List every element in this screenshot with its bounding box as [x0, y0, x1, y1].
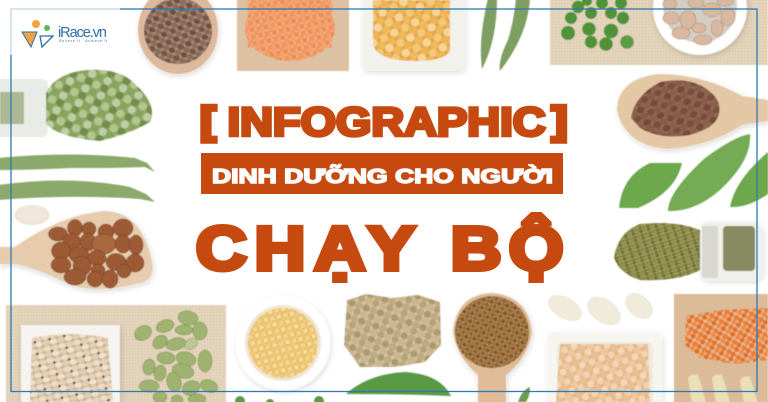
wooden spoon: fava beans left — [0, 211, 153, 289]
main title: CHẠY BỘ — [196, 214, 563, 282]
baby corn — [688, 374, 758, 402]
logo — [0, 0, 120, 55]
jar and green split peas left — [0, 70, 152, 141]
white bean — [15, 206, 49, 224]
heading: infographic: [ — [200, 100, 216, 142]
snow pea pods right — [619, 134, 768, 211]
snow pea bottom — [346, 372, 451, 396]
bowl: brown lentils on wooden spoon — [138, 0, 218, 74]
green beans — [132, 309, 220, 402]
mung beans — [614, 223, 704, 280]
dish: yellow split peas — [363, 0, 464, 70]
white dish: chickpeas — [548, 332, 662, 402]
subtitle banner: DINH DƯỠNG CHO NGƯỜI — [212, 164, 553, 188]
mat: orange lentils — [237, 0, 349, 71]
heading: infographic: ] — [552, 100, 567, 142]
spoon: buckwheat — [453, 293, 532, 402]
white bowl of beans — [653, 0, 747, 55]
green peas — [561, 0, 634, 51]
three white beans — [544, 289, 657, 330]
heading: infographic: INFOGRAPHIC — [228, 100, 546, 144]
red lentils — [685, 308, 768, 364]
small green pod — [518, 387, 530, 402]
mat: black-eyed peas and green beans — [6, 305, 226, 402]
logo icon: runners — [22, 20, 53, 47]
beige lentils pile — [344, 294, 441, 367]
wooden spoon: brown beans right — [617, 74, 768, 149]
mat: green peas and white bowl — [550, 0, 768, 65]
logo tagline: Believe It - Achieve It — [59, 39, 108, 43]
subtitle banner — [201, 153, 563, 194]
white dish: black-eyed peas — [21, 325, 120, 402]
mat: red lentils and baby corn — [674, 294, 768, 402]
white bowl: yellow lentils — [236, 296, 330, 390]
long beans left — [0, 154, 155, 202]
logo backing — [0, 0, 120, 55]
long green beans top — [481, 0, 530, 71]
glass jar right — [700, 222, 762, 280]
green bits bottom — [235, 396, 324, 402]
logo wordmark: iRace.vn — [58, 25, 107, 41]
